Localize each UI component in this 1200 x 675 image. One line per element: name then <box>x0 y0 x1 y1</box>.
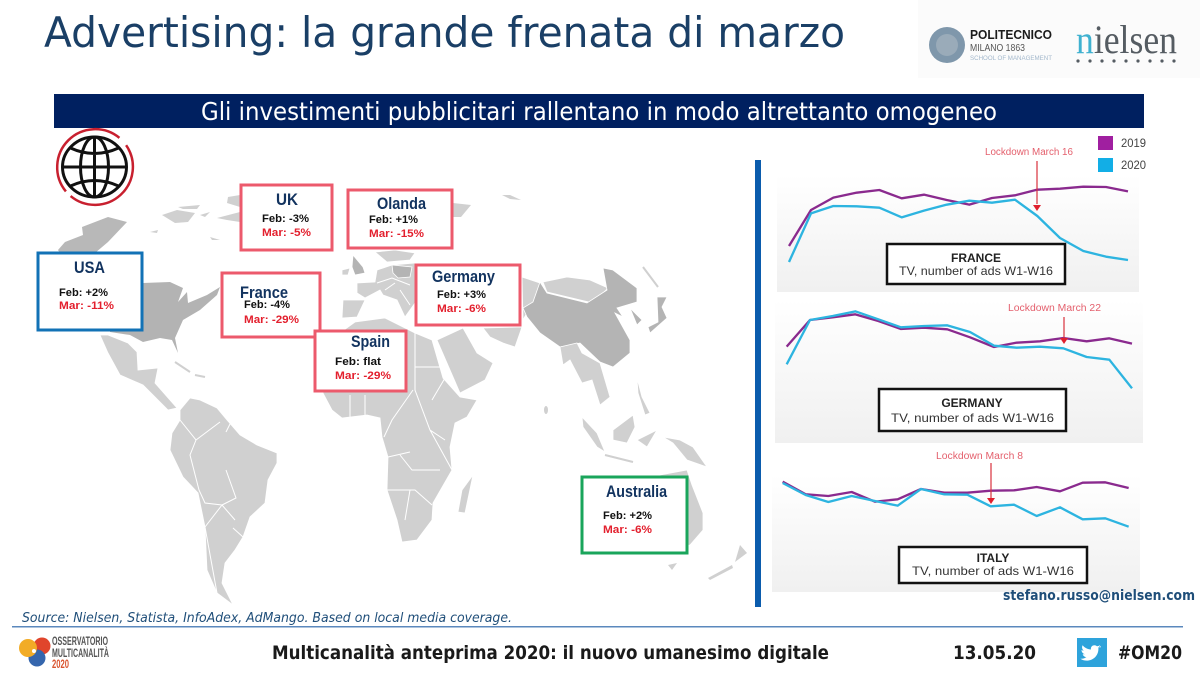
callout: Spain <box>315 331 406 391</box>
callout: France <box>222 273 320 337</box>
logo: Nielsen: nielsen <box>1076 17 1177 62</box>
chart: Italy: TV, number of ads W1-W16 <box>912 564 1074 578</box>
logo: Politecnico di Milano: POLITECNICO <box>970 28 1052 42</box>
logo: Osservatorio Multicanalità: MULTICANALITÀ <box>52 645 109 660</box>
map: South America <box>170 398 277 605</box>
map: Africa <box>323 318 477 542</box>
map: Alaska <box>58 217 127 253</box>
map: Arctic islands <box>150 195 240 240</box>
callout: USA: Mar: -11% <box>59 300 114 312</box>
chart: France: Lockdown March 16 <box>985 147 1073 158</box>
map: Mongolia <box>543 277 608 303</box>
map: China <box>523 268 637 367</box>
icon: globe <box>57 129 133 205</box>
chart: France: FRANCE <box>951 251 1001 265</box>
map: Mexico and Central America <box>100 335 177 410</box>
callout: Olanda: Mar: -15% <box>369 228 424 240</box>
footer hashtag: #OM20 <box>1118 642 1182 664</box>
callout: USA: Feb: +2% <box>59 287 108 299</box>
logo: Politecnico di Milano: MILANO 1863 <box>970 42 1025 54</box>
callout: France: Mar: -29% <box>244 314 299 326</box>
callout: Australia: Australia <box>606 482 667 501</box>
callout: USA: USA <box>74 258 105 277</box>
callout: UK: UK <box>276 190 299 209</box>
logo: Osservatorio Multicanalità: 2020 <box>52 657 69 671</box>
world map <box>58 195 747 605</box>
logo: Politecnico di Milano <box>918 0 1200 78</box>
subtitle banner: Gli investimenti pubblicitari rallentano in modo altrettanto omogeneo <box>201 97 997 126</box>
map: UK and Ireland <box>342 255 365 275</box>
legend: 2019 <box>1121 136 1146 150</box>
title: Advertising: la grande frenata di marzo <box>44 8 845 57</box>
map: Europe <box>357 263 415 317</box>
logo: Osservatorio Multicanalità: OSSERVATORIO <box>52 634 108 648</box>
chart: Italy: ITALY <box>977 551 1009 565</box>
map: Tasmania and New Zealand <box>668 545 747 580</box>
callout: Germany: Germany <box>432 267 495 286</box>
map: USA <box>110 282 220 353</box>
callout: Olanda: Feb: +1% <box>369 214 418 226</box>
callout: France: France <box>240 283 288 302</box>
callout: USA <box>38 253 142 330</box>
vertical divider <box>755 160 761 607</box>
chart: France: TV, number of ads W1-W16 <box>899 264 1053 278</box>
callout: UK <box>241 185 332 250</box>
map: Caribbean <box>175 362 205 377</box>
footer date: 13.05.20 <box>953 642 1036 664</box>
logo: Politecnico di Milano: SCHOOL OF MANAGEMENT <box>970 55 1052 62</box>
callout: Germany: Feb: +3% <box>437 289 486 301</box>
chart: Germany: Lockdown March 22 <box>1008 303 1101 314</box>
callout: Australia: Mar: -6% <box>603 524 652 536</box>
map: Madagascar <box>458 475 473 513</box>
map: Northern Russia <box>453 195 521 217</box>
callout: Germany <box>416 265 520 325</box>
map: Japan and Korea <box>630 267 667 333</box>
chart: Germany: GERMANY <box>941 396 1003 410</box>
subtitle banner <box>54 94 1144 128</box>
footer title: Multicanalità anteprima 2020: il nuovo umanesimo digitale <box>272 642 829 664</box>
source note: Source: Nielsen, Statista, InfoAdex, AdMango. Based on local media coverage. <box>22 610 512 626</box>
icon: Twitter <box>1077 638 1107 667</box>
map: Arabia and Middle East <box>437 328 493 393</box>
map: Spain <box>342 300 365 318</box>
callout: Spain: Feb: flat <box>335 356 381 368</box>
callout: Olanda: Olanda <box>377 194 426 213</box>
map: South East Asia <box>544 343 707 467</box>
callout: Spain: Spain <box>351 332 390 351</box>
map: Central Asia <box>522 277 540 320</box>
legend: 2020 <box>1121 158 1146 172</box>
callout: Spain: Mar: -29% <box>335 370 391 382</box>
callout: France: Feb: -4% <box>244 299 290 311</box>
callout: Olanda <box>348 190 452 248</box>
callout: Germany: Mar: -6% <box>437 303 486 315</box>
chart: Italy <box>772 451 1140 592</box>
callout: UK: Mar: -5% <box>262 227 311 239</box>
chart: Italy: Lockdown March 8 <box>936 451 1023 462</box>
legend <box>1098 136 1146 172</box>
callout: Australia: Feb: +2% <box>603 510 652 522</box>
map: Poland <box>392 265 412 278</box>
callout: Australia <box>582 477 687 553</box>
map: Australia <box>640 470 703 550</box>
map: Scandinavia <box>375 250 415 262</box>
chart: Germany: TV, number of ads W1-W16 <box>891 411 1054 425</box>
chart: Germany <box>775 300 1143 443</box>
logo: Osservatorio Multicanalità <box>19 634 109 671</box>
chart: France <box>777 147 1139 292</box>
callout: UK: Feb: -3% <box>262 213 309 225</box>
